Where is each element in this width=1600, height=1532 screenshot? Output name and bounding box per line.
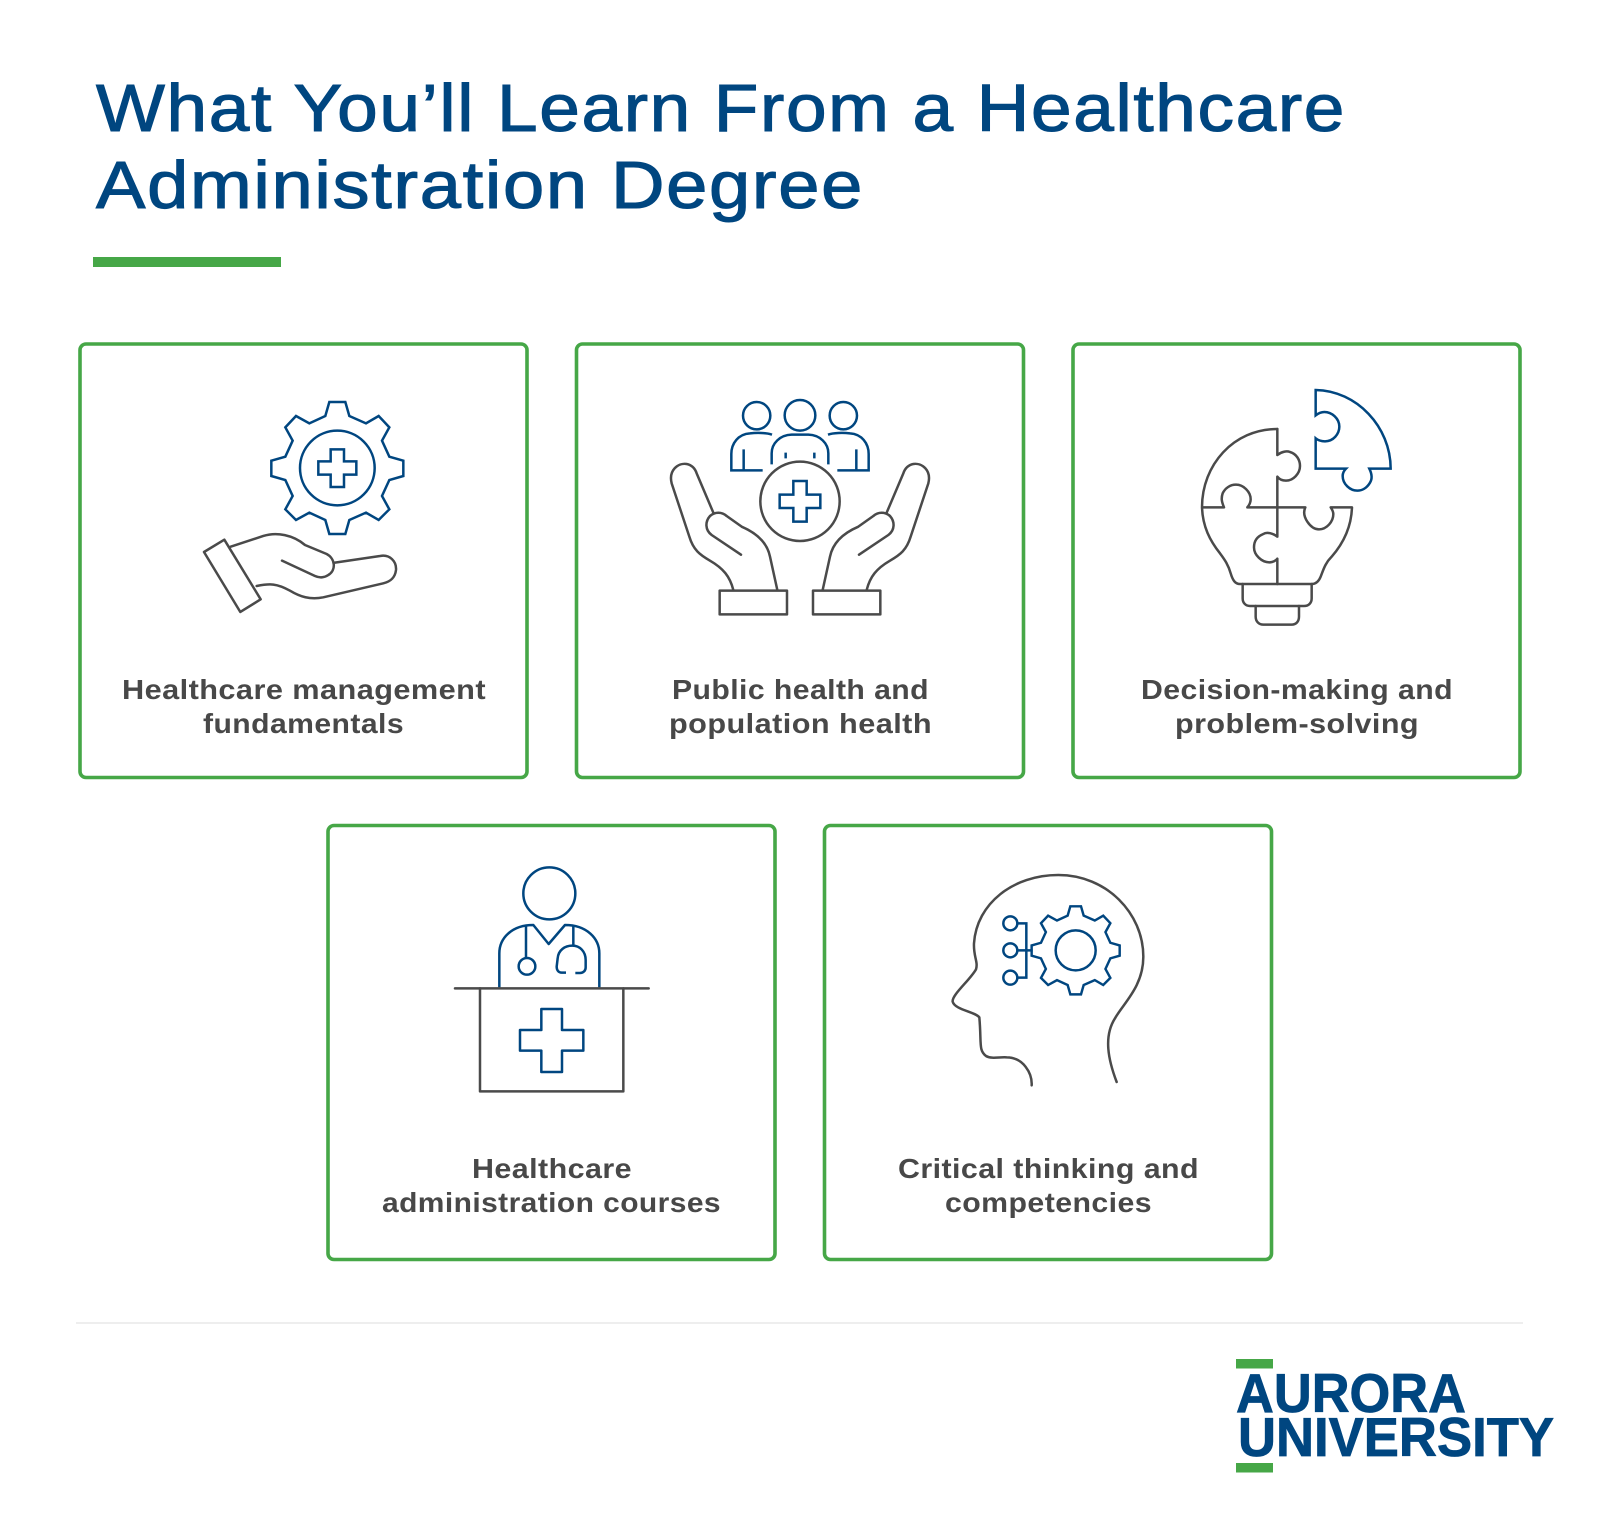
label: Critical thinking and bbox=[898, 1153, 1199, 1184]
label bbox=[898, 1153, 1199, 1218]
label: fundamentals bbox=[203, 708, 404, 739]
label: Healthcare bbox=[472, 1153, 632, 1184]
icon: hands holding people and medical cross bbox=[671, 400, 929, 614]
logo: Aurora University: AURORA bbox=[1236, 1362, 1466, 1424]
title bbox=[96, 71, 1346, 223]
title: Administration Degree bbox=[96, 148, 864, 223]
label: population health bbox=[669, 708, 932, 739]
title: What You’ll Learn From a Healthcare bbox=[96, 71, 1346, 146]
label: Public health and bbox=[672, 674, 929, 705]
panel: public health and population health bbox=[576, 344, 1024, 778]
icon: head with gear bbox=[953, 875, 1143, 1085]
label bbox=[382, 1153, 721, 1218]
title underline bar bbox=[93, 257, 281, 267]
label bbox=[669, 674, 932, 739]
label bbox=[122, 674, 486, 739]
panel: decision-making and problem-solving bbox=[1073, 344, 1520, 778]
logo: Aurora University: UNIVERSITY bbox=[1238, 1406, 1554, 1468]
label: Decision-making and bbox=[1141, 674, 1453, 705]
label: competencies bbox=[945, 1187, 1152, 1218]
icon: hand holding medical gear bbox=[204, 402, 403, 612]
icon: puzzle light bulb bbox=[1202, 390, 1391, 625]
label: administration courses bbox=[382, 1187, 721, 1218]
panel: healthcare management fundamentals bbox=[80, 344, 527, 778]
label: Healthcare management bbox=[122, 674, 486, 705]
icon: doctor at desk bbox=[455, 867, 649, 1091]
logo: Aurora University bbox=[1236, 1359, 1554, 1472]
panel: critical thinking and competencies bbox=[824, 826, 1272, 1260]
label bbox=[1141, 674, 1453, 739]
label: problem-solving bbox=[1175, 708, 1419, 739]
panel: healthcare administration courses bbox=[328, 826, 775, 1260]
